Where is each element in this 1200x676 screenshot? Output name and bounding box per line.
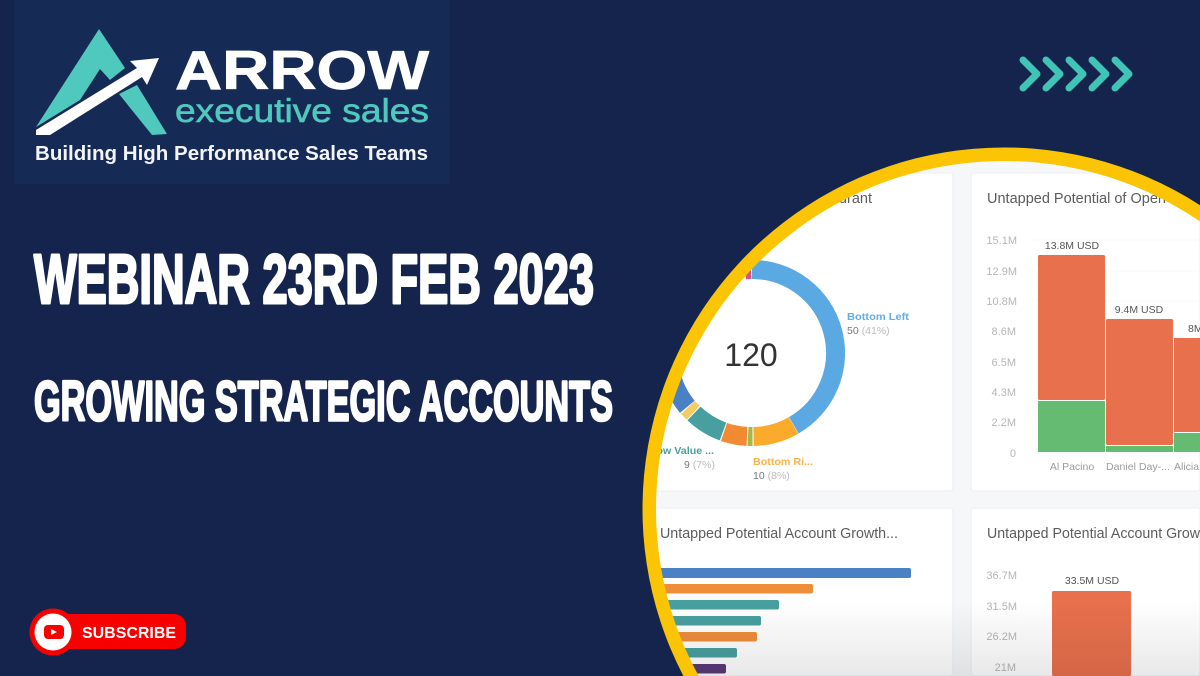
y axis labels: 10.8M	[986, 296, 1017, 308]
icon: mountain and arrow	[36, 29, 167, 135]
donut label: bottom right	[753, 457, 813, 482]
y axis labels: 21M	[995, 662, 1016, 674]
title: webinar date: WEBINAR 23RD FEB 2023	[34, 240, 594, 318]
bar: Daniel Day: 9.4M USD	[1115, 304, 1164, 316]
bar: Alicia: Alicia	[1174, 461, 1199, 473]
card heading: Untapped Potential Account Growth...	[660, 526, 898, 542]
panel: donut chart card	[650, 173, 953, 491]
y axis labels: 12.9M	[986, 266, 1017, 278]
y axis labels: 8.6M	[992, 326, 1016, 338]
bar: 33.5M	[1052, 575, 1131, 676]
donut label: low value: 9 (7%)	[684, 459, 715, 471]
bar: Al Pacino	[1038, 240, 1105, 473]
donut chart	[670, 270, 836, 437]
horizontal bars	[650, 568, 911, 674]
bar: Al Pacino: Al Pacino	[1050, 461, 1094, 473]
bar: Al Pacino: 13.8M USD	[1045, 240, 1100, 252]
donut label: low value	[660, 446, 714, 470]
logo wordmark: ARROW	[175, 39, 429, 101]
y axis labels	[986, 235, 1017, 460]
dashboard screenshot in circle	[645, 150, 1200, 676]
donut label: low value: Low Value ...	[650, 446, 714, 457]
icon: five chevrons	[1023, 60, 1129, 88]
card heading: Account Growth Quadrant	[704, 191, 872, 207]
panel: open opportunities stacked bar chart card	[971, 173, 1200, 491]
donut label: bottom right: 10 (8%)	[753, 470, 790, 482]
donut label: bottom left: Bottom Left	[847, 312, 910, 323]
logo tagline: Building High Performance Sales Teams	[35, 143, 428, 165]
donut total: 120	[724, 337, 778, 373]
y axis labels: 2.2M	[992, 417, 1016, 429]
bar: Daniel Day	[1106, 304, 1173, 473]
subtitle: webinar topic: GROWING STRATEGIC ACCOUNTS	[34, 370, 613, 434]
panel: horizontal bar chart card	[650, 508, 953, 676]
y axis labels: 4.3M	[992, 387, 1016, 399]
donut label: bottom left	[847, 312, 910, 337]
bar: Daniel Day: Daniel Day-...	[1106, 461, 1170, 473]
yellow circle ring	[642, 147, 1200, 676]
y axis labels: 26.2M	[986, 631, 1017, 643]
bar: 33.5M: 33.5M USD	[1065, 575, 1120, 587]
logo: Arrow Executive Sales	[14, 0, 450, 184]
bar: Alicia	[1174, 323, 1200, 473]
donut label: bottom left: 50 (41%)	[847, 325, 890, 337]
icon: play button	[44, 625, 64, 639]
panel: account growth column chart card	[971, 508, 1200, 676]
subscribe label: SUBSCRIBE	[82, 625, 176, 642]
y axis labels	[986, 570, 1017, 674]
logo sub-brand: executive sales	[175, 92, 429, 129]
y axis labels: 36.7M	[986, 570, 1017, 582]
y axis labels: 31.5M	[986, 601, 1017, 613]
y axis labels: 0	[1010, 448, 1016, 460]
card heading: Untapped Potential Account Grow	[987, 526, 1200, 542]
card heading: Untapped Potential of Open	[987, 191, 1166, 207]
subscribe button	[30, 608, 186, 656]
y axis labels: 15.1M	[986, 235, 1017, 247]
y axis labels: 6.5M	[992, 357, 1016, 369]
donut label: bottom right: Bottom Ri...	[753, 457, 813, 468]
